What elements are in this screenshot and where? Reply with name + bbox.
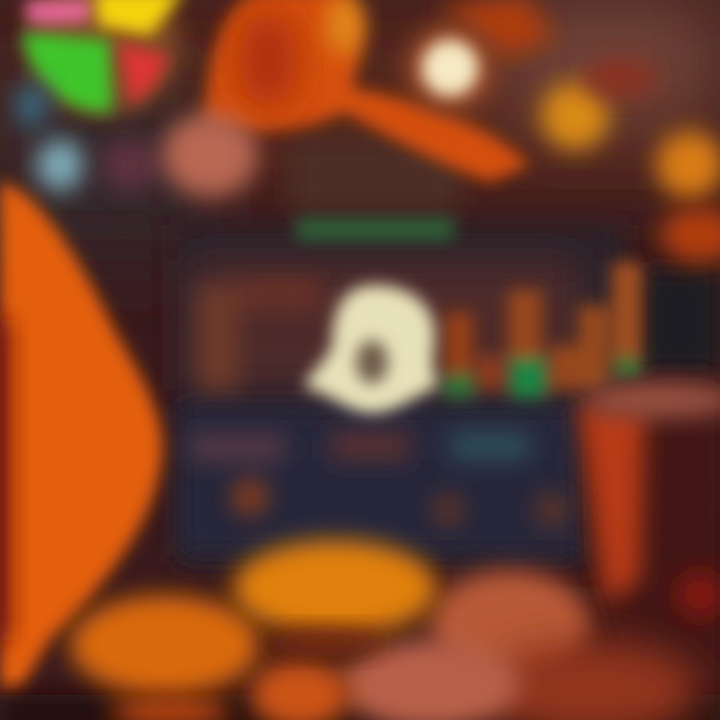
icon: large orange pumpkin at left bbox=[0, 182, 163, 690]
panel: dark dashboard screen bbox=[175, 140, 720, 565]
icon: orange witch hat bbox=[162, 0, 555, 197]
chart: orange and green candlesticks bbox=[444, 262, 642, 398]
icon: colour wheel balloon bbox=[14, 0, 185, 191]
icon: pale ghost logo bbox=[305, 285, 440, 414]
icon: glowing lights bbox=[406, 24, 720, 263]
text block: blurred dashboard labels bbox=[190, 432, 569, 527]
icon: red cup at right bbox=[578, 382, 720, 720]
chart: green header bar bbox=[295, 218, 455, 240]
chart: left bars bbox=[198, 280, 320, 390]
icon: stacked orange coins bbox=[0, 540, 720, 720]
